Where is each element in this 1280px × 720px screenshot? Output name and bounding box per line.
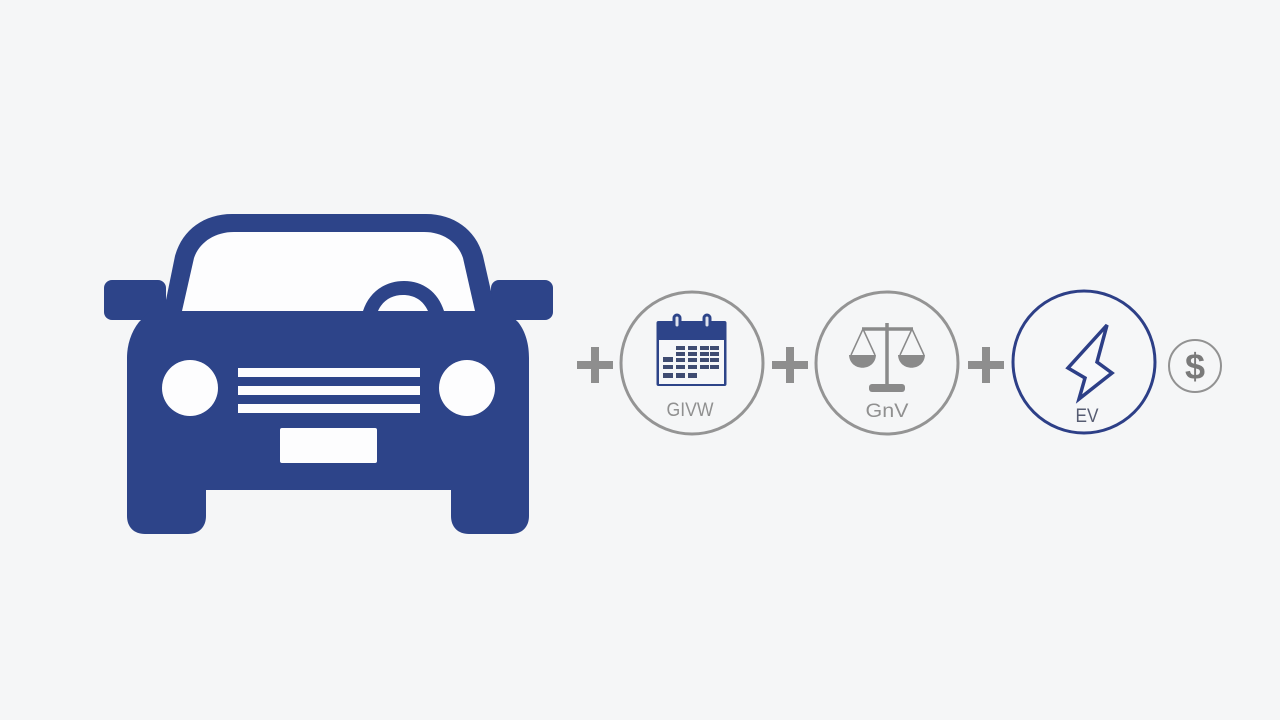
car mirrors bbox=[104, 280, 553, 320]
badge ring bbox=[816, 292, 958, 434]
windshield bbox=[182, 232, 475, 311]
icon: car front view bbox=[104, 214, 553, 534]
icon: calendar bbox=[656, 315, 726, 386]
plus sign 3 bbox=[968, 347, 1004, 383]
dollar badge bbox=[1169, 340, 1221, 392]
plus sign 2 bbox=[772, 347, 808, 383]
scales badge bbox=[816, 292, 958, 434]
grille bbox=[238, 368, 420, 413]
badge ring bbox=[621, 292, 763, 434]
icon: balance scales bbox=[849, 323, 925, 392]
headlights bbox=[162, 360, 495, 416]
calendar badge bbox=[621, 292, 763, 434]
plus sign 1 bbox=[577, 347, 613, 383]
label: EV: EV bbox=[1076, 406, 1099, 427]
label: GIVW: GIVW bbox=[666, 400, 714, 421]
badge ring bbox=[1013, 291, 1155, 433]
EV badge bbox=[1013, 291, 1155, 433]
icon: dollar sign: $ bbox=[1185, 346, 1205, 387]
license plate bbox=[280, 428, 377, 463]
icon: lightning bolt bbox=[1068, 325, 1112, 399]
label: GnV: GnV bbox=[866, 401, 909, 422]
steering wheel arc bbox=[363, 281, 444, 311]
car roof and windshield frame bbox=[166, 214, 493, 330]
car body bbox=[127, 311, 529, 534]
dollar ring bbox=[1169, 340, 1221, 392]
